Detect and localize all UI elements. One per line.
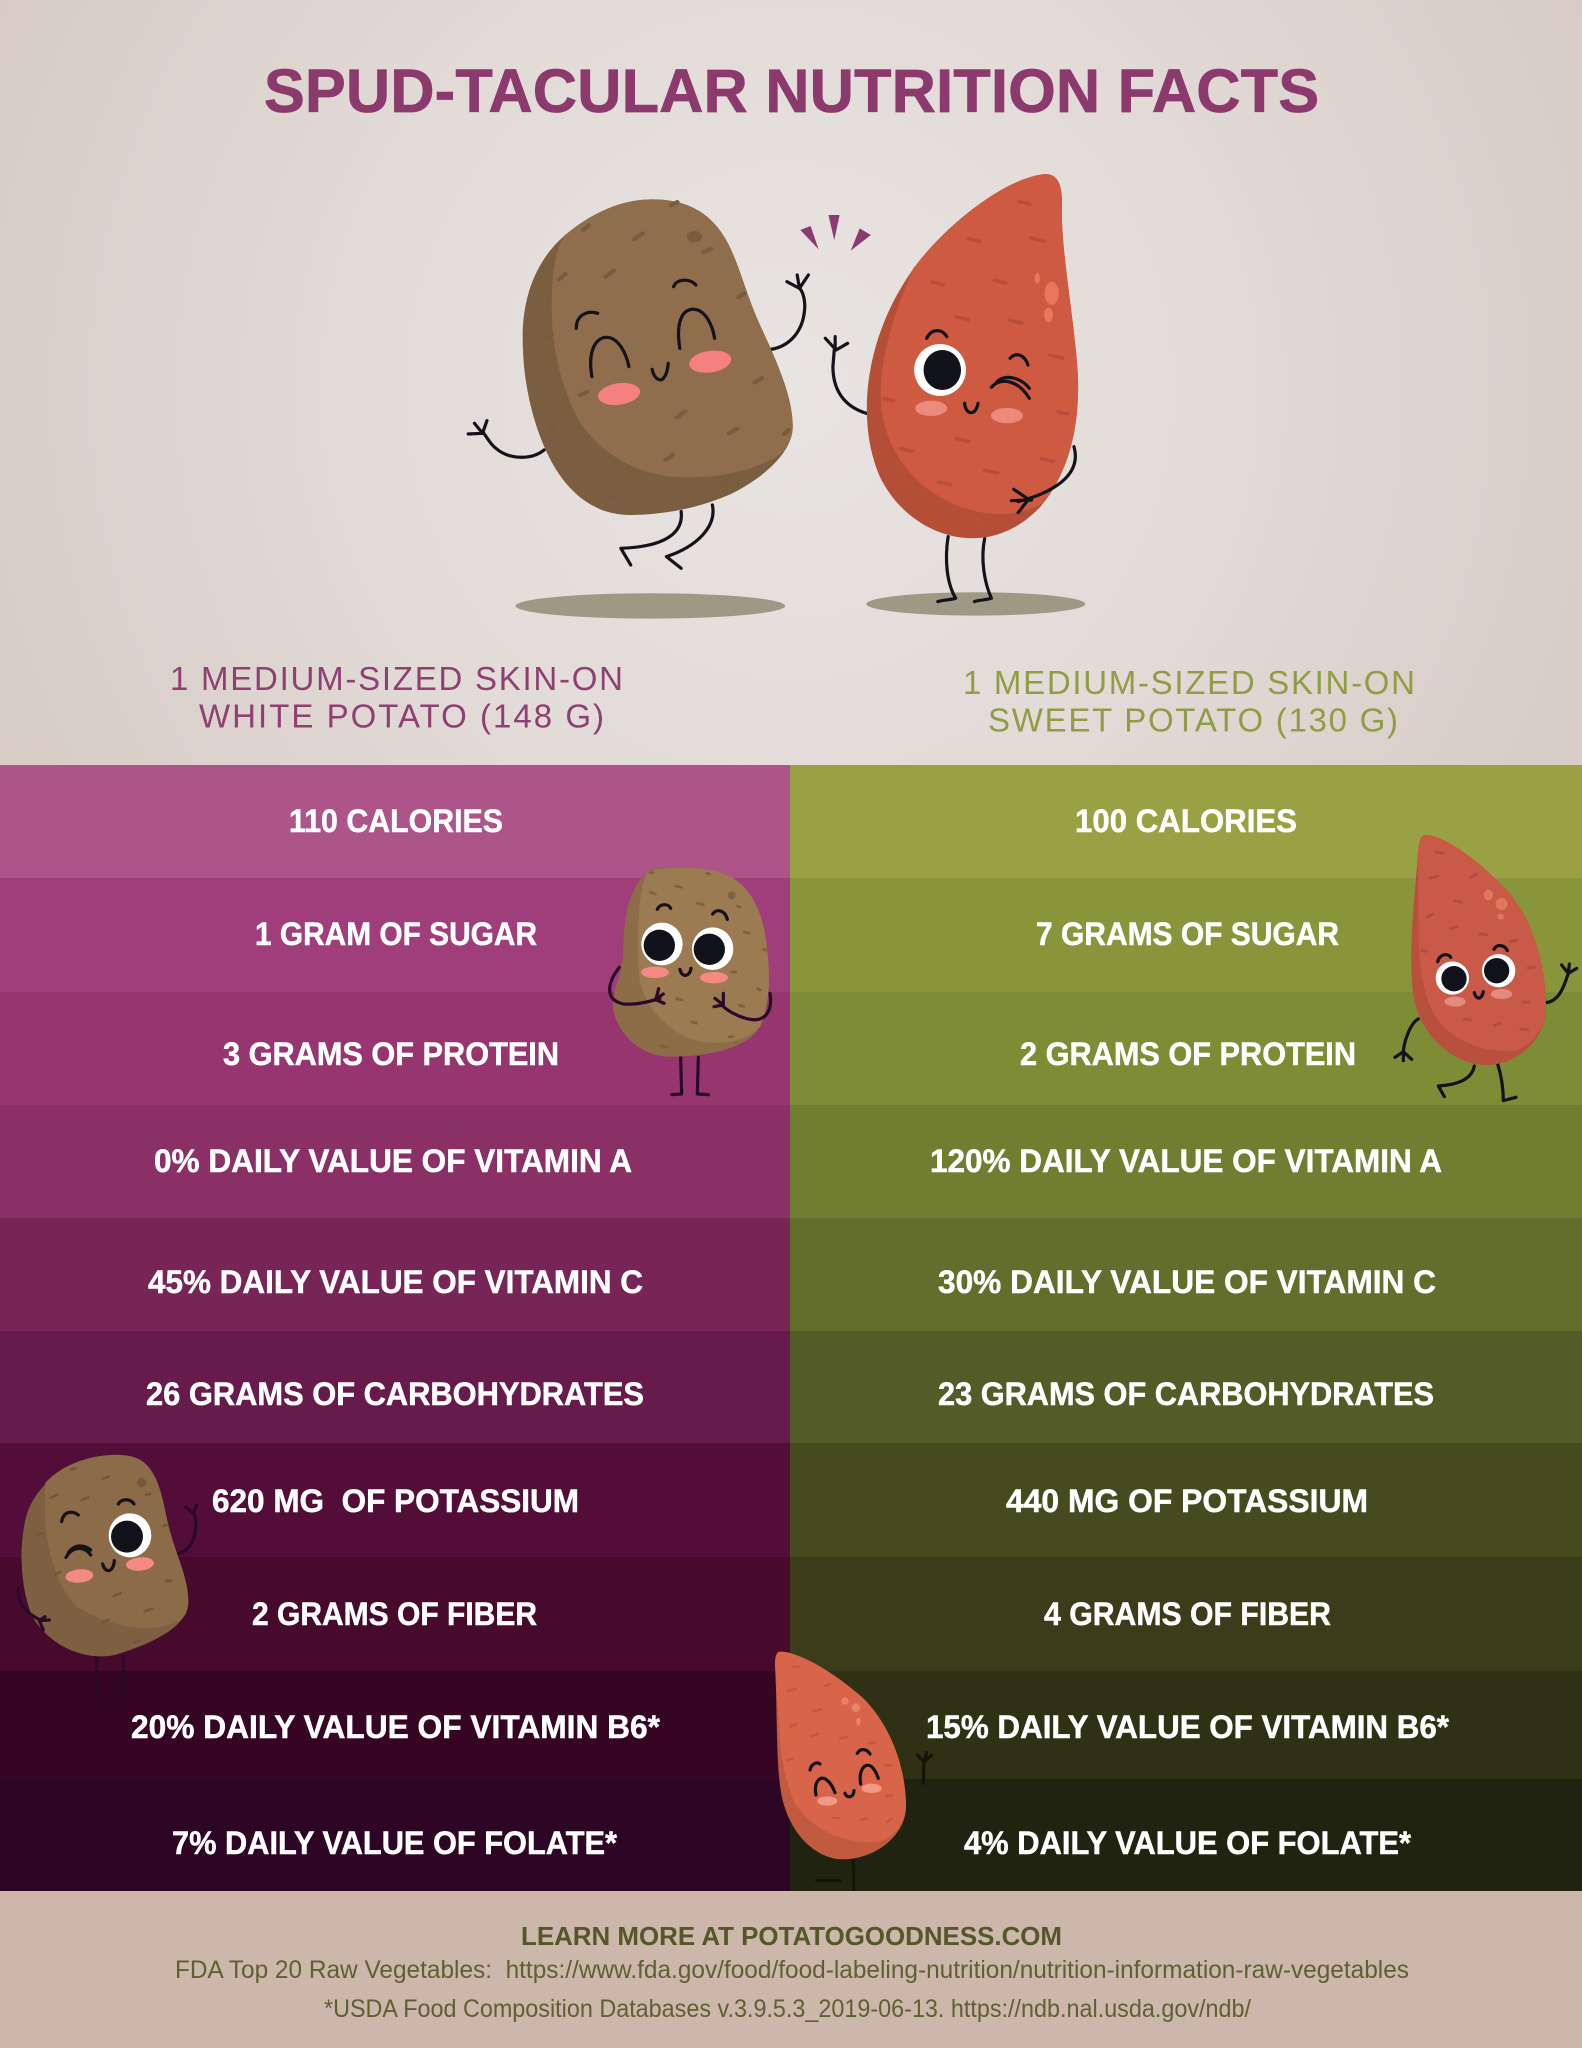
label: sweet potato serving <box>963 664 1415 738</box>
sweet potato facts list: 120% DAILY VALUE OF VITAMIN A <box>930 1143 1442 1179</box>
sweet potato facts list: 7 GRAMS OF SUGAR <box>1036 916 1339 952</box>
white potato facts list: 620 MG OF POTASSIUM <box>212 1483 579 1519</box>
label: sweet potato serving: SWEET POTATO (130 G) <box>988 702 1398 738</box>
label: white potato serving: WHITE POTATO (148 G) <box>199 698 604 734</box>
header background <box>0 0 1582 766</box>
sweet potato facts list: 4 GRAMS OF FIBER <box>1044 1596 1331 1632</box>
white potato facts list: 3 GRAMS OF PROTEIN <box>223 1036 559 1072</box>
panel: white potato nutrition <box>0 765 790 1891</box>
white potato facts list: 7% DAILY VALUE OF FOLATE* <box>172 1825 618 1861</box>
title: SPUD-TACULAR NUTRITION FACTS <box>264 57 1319 125</box>
white potato facts list: 1 GRAM OF SUGAR <box>255 916 537 952</box>
character: white potato <box>468 199 808 568</box>
character: big-eyed white potato <box>610 867 771 1095</box>
sweet potato facts list: 30% DAILY VALUE OF VITAMIN C <box>938 1264 1436 1300</box>
sweet potato facts list: 23 GRAMS OF CARBOHYDRATES <box>938 1376 1434 1412</box>
footer call to action: LEARN MORE AT POTATOGOODNESS.COM <box>521 1921 1062 1951</box>
sweet potato facts list: 4% DAILY VALUE OF FOLATE* <box>964 1825 1412 1861</box>
white potato facts list: 110 CALORIES <box>289 803 503 839</box>
character: sweet potato <box>825 174 1078 602</box>
label: white potato serving <box>170 660 623 734</box>
white potato facts list: 20% DAILY VALUE OF VITAMIN B6* <box>131 1709 661 1745</box>
panel: sweet potato nutrition <box>790 765 1582 1891</box>
footer source: FDA: FDA Top 20 Raw Vegetables: https://www.fda.gov/food/food-labeling-nutrition/nutrition-information-raw-vegetables <box>175 1956 1409 1984</box>
character: smiling sweet potato <box>775 1652 932 1892</box>
character: waving sweet potato <box>1395 835 1577 1101</box>
white potato facts list <box>131 803 661 1861</box>
character: winking white potato <box>18 1455 197 1697</box>
label: sweet potato serving: 1 MEDIUM-SIZED SKIN-ON <box>963 664 1415 701</box>
label: white potato serving: 1 MEDIUM-SIZED SKIN-ON <box>170 660 623 697</box>
sweet potato facts list: 440 MG OF POTASSIUM <box>1006 1483 1368 1519</box>
sweet potato facts list: 100 CALORIES <box>1075 803 1297 839</box>
sweet potato facts list <box>926 803 1450 1861</box>
sweet potato facts list: 2 GRAMS OF PROTEIN <box>1020 1036 1356 1072</box>
white potato facts list: 26 GRAMS OF CARBOHYDRATES <box>146 1376 644 1412</box>
sweet potato facts list: 15% DAILY VALUE OF VITAMIN B6* <box>926 1709 1450 1745</box>
white potato facts list: 2 GRAMS OF FIBER <box>252 1596 537 1632</box>
footer source: USDA: *USDA Food Composition Databases v.3.9.5.3_2019-06-13. https://ndb.nal.usda.gov/ndb/ <box>324 1995 1251 2023</box>
icon: high-five sparkle <box>800 215 871 251</box>
illustration: high-fiving potatoes <box>468 174 1085 619</box>
ground shadow: white potato <box>516 593 785 619</box>
white potato facts list: 45% DAILY VALUE OF VITAMIN C <box>148 1264 643 1300</box>
footer panel <box>0 1891 1582 2048</box>
white potato facts list: 0% DAILY VALUE OF VITAMIN A <box>154 1143 632 1179</box>
ground shadow: sweet potato <box>866 592 1085 616</box>
